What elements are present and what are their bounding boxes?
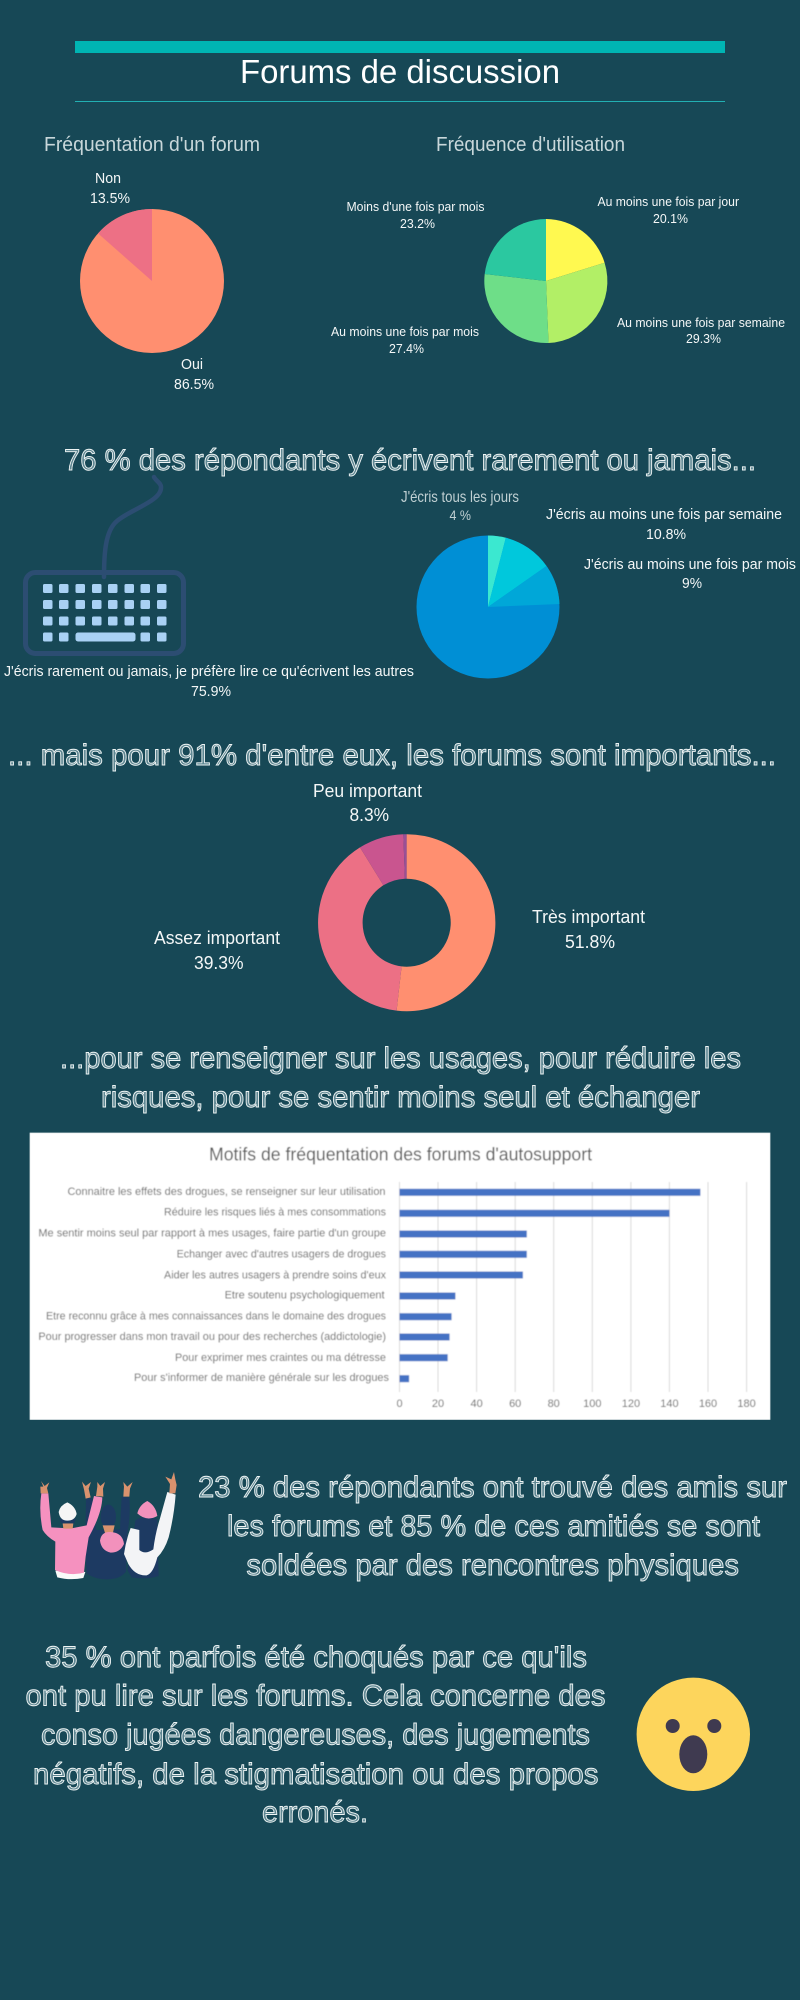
heading: raisons: ...pour se renseigner sur les usages, pour réduire les (60, 1042, 741, 1075)
title block: Forums de discussion (240, 53, 560, 90)
heading: 76 % écrivent rarement: 76 % des répondants y écrivent rarement ou jamais... (64, 444, 756, 477)
pie chart: fréquence (484, 219, 607, 343)
label: assez important (154, 928, 280, 973)
value axis: 40 (470, 1398, 483, 1410)
label: une fois par mois (584, 557, 796, 592)
label: oui: Oui (181, 357, 203, 373)
value axis: 80 (548, 1398, 560, 1410)
value axis: 160 (699, 1398, 717, 1410)
navy friend (85, 1497, 130, 1579)
text: choqués: 35 % ont parfois été choqués par ce qu'ils (45, 1641, 587, 1674)
label: au moins une fois par jour: Au moins une fois par jour (598, 195, 739, 209)
heading: fréquence: Fréquence d'utilisation (436, 134, 625, 156)
label: tous les jours (401, 489, 519, 523)
label: une fois par mois: J'écris au moins une fois par mois (584, 557, 796, 573)
label: non value: 13.5% (90, 191, 130, 207)
text: amitiés: les forums et 85 % de ces amitiés se sont (227, 1510, 761, 1543)
label: très important: 51.8% (565, 932, 615, 952)
heading: raisons (60, 1042, 741, 1114)
category labels: Me sentir moins seul par rapport à mes usages, faire partie d'un groupe (38, 1228, 386, 1240)
pink friend (55, 1571, 85, 1579)
label: au moins une fois par semaine: Au moins une fois par semaine (617, 316, 785, 330)
label: tous les jours: 4 % (450, 507, 471, 523)
label: rarement ou jamais (4, 664, 414, 700)
category labels: Pour progresser dans mon travail ou pour des recherches (addictologie) (38, 1331, 386, 1343)
category labels: Etre reconnu grâce à mes connaissances dans le domaine des drogues (46, 1310, 386, 1322)
text: amitiés: 23 % des répondants ont trouvé des amis sur (198, 1471, 787, 1504)
category labels: Pour s'informer de manière générale sur les drogues (134, 1372, 389, 1384)
heading: 91 % importants: ... mais pour 91% d'entre eux, les forums sont importants... (8, 739, 776, 772)
label: peu important (313, 781, 422, 825)
donut chart: importance (318, 834, 495, 1011)
text: choqués: erronés. (262, 1796, 368, 1829)
label: une fois par semaine (546, 507, 782, 543)
label: non: Non (95, 171, 121, 187)
label: au moins une fois par mois: Au moins une fois par mois (331, 325, 479, 339)
value axis: 140 (660, 1398, 679, 1410)
label: au moins une fois par jour (598, 195, 739, 226)
category labels: Echanger avec d'autres usagers de drogues (177, 1248, 386, 1260)
label: au moins une fois par semaine (617, 316, 785, 346)
value axis: 120 (622, 1398, 640, 1410)
label: peu important: 8.3% (350, 805, 389, 825)
value axis: 0 (396, 1398, 403, 1410)
text: choqués: conso jugées dangereuses, des jugements (41, 1719, 590, 1752)
label: assez important: 39.3% (194, 953, 244, 973)
label: au moins une fois par mois: 27.4% (389, 342, 424, 356)
value axis (396, 1398, 756, 1410)
hands (40, 1472, 177, 1499)
icon: friends raising hands (40, 1472, 177, 1579)
icon: shocked emoji (637, 1678, 750, 1791)
label: moins d'une fois par mois: Moins d'une fois par mois (346, 200, 484, 214)
panel: bar chart motifs (30, 1132, 770, 1420)
label: au moins une fois par semaine: 29.3% (686, 332, 721, 346)
category labels: Aider les autres usagers à prendre soins d'eux (164, 1269, 386, 1281)
pie chart: fréquentation (80, 209, 224, 353)
chart title: Motifs de fréquentation des forums d'autosupport (209, 1144, 592, 1164)
label: moins d'une fois par mois (346, 200, 484, 231)
text: choqués: ont pu lire sur les forums. Cela concerne des (26, 1680, 606, 1713)
text: choqués: négatifs, de la stigmatisation ou des propos (33, 1758, 598, 1791)
label: rarement ou jamais: J'écris rarement ou jamais, je préfère lire ce qu'écrivent les autres (4, 664, 414, 680)
label: très important (532, 907, 645, 952)
panel: fréquentation d'un forum (44, 134, 260, 393)
panel: fréquence d'utilisation (331, 134, 785, 356)
label: assez important: Assez important (154, 928, 280, 948)
label: une fois par semaine: 10.8% (646, 527, 686, 543)
white friend (127, 1516, 159, 1578)
label: tous les jours: J'écris tous les jours (401, 489, 519, 506)
label: une fois par mois: 9% (682, 576, 702, 592)
category labels: Connaitre les effets des drogues, se renseigner sur leur utilisation (68, 1186, 386, 1198)
label: au moins une fois par mois (331, 325, 479, 356)
value axis: 20 (432, 1398, 444, 1410)
label: rarement ou jamais: 75.9% (191, 684, 231, 700)
label: moins d'une fois par mois: 23.2% (400, 217, 435, 231)
value axis: 60 (509, 1398, 521, 1410)
label: très important: Très important (532, 907, 645, 927)
icon: keyboard (26, 477, 184, 654)
label: une fois par semaine: J'écris au moins une fois par semaine (546, 507, 782, 523)
text: choqués (26, 1641, 606, 1829)
bars (400, 1189, 700, 1382)
pie chart: écriture (416, 536, 560, 678)
heading: raisons: risques, pour se sentir moins seul et échanger (101, 1081, 700, 1114)
heading: fréquentation: Fréquentation d'un forum (44, 134, 260, 156)
text: amitiés: soldées par des rencontres physiques (246, 1549, 739, 1582)
label: au moins une fois par jour: 20.1% (653, 212, 688, 226)
category labels: Réduire les risques liés à mes consommations (164, 1207, 386, 1219)
title block (75, 41, 725, 102)
category labels (38, 1186, 389, 1384)
value axis: 100 (583, 1398, 601, 1410)
category labels: Pour exprimer mes craintes ou ma détresse (175, 1352, 386, 1364)
text: amitiés (198, 1471, 787, 1582)
category labels: Etre soutenu psychologiquement (225, 1289, 385, 1301)
label: oui value: 86.5% (174, 377, 214, 393)
label: peu important: Peu important (313, 781, 422, 801)
value axis: 180 (737, 1398, 756, 1410)
